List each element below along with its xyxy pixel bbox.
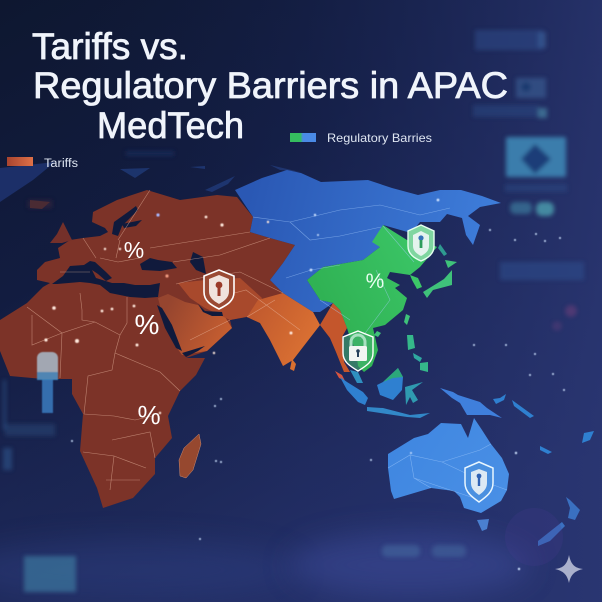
map: Borneo bbox=[377, 368, 403, 400]
map: Sumatra bbox=[340, 377, 368, 405]
title bbox=[32, 26, 508, 146]
title: MedTech bbox=[97, 105, 244, 146]
map: Sri Lanka bbox=[290, 359, 296, 371]
map: Honshu bbox=[423, 270, 452, 298]
map: Luzon bbox=[407, 335, 415, 350]
map: Madagascar bbox=[179, 434, 201, 478]
map: India shading bbox=[247, 293, 320, 366]
legend: regulatory barriers: Regulatory Barries bbox=[327, 131, 432, 145]
map: north Borneo bbox=[383, 368, 403, 382]
map: Sulawesi bbox=[405, 382, 423, 405]
map: Southeast Asia islands bbox=[335, 335, 594, 454]
map: Myanmar shading bbox=[320, 303, 350, 372]
map: Australia bbox=[388, 418, 509, 531]
blurred medical tube hologram bbox=[37, 352, 58, 413]
map: glowing data points bbox=[44, 213, 293, 414]
icon: padlock shield Southeast Asia bbox=[343, 331, 373, 371]
map: Taiwan bbox=[404, 314, 410, 325]
map: Hokkaido bbox=[445, 260, 457, 268]
legend: tariffs bbox=[7, 157, 78, 170]
title: Regulatory Barriers in APAC bbox=[33, 65, 508, 106]
map: Hainan bbox=[374, 331, 381, 337]
map: Korea bbox=[410, 275, 422, 289]
map: Siberia and Central Asia (blue) bbox=[235, 170, 501, 312]
lens flare ring bbox=[505, 305, 577, 566]
map: Iran and Pakistan shading bbox=[178, 278, 262, 320]
icon: shield Middle East bbox=[204, 270, 234, 309]
icon: shield Northeast China bbox=[408, 225, 434, 261]
map: New Guinea bbox=[440, 388, 502, 418]
map: UK bbox=[50, 222, 72, 243]
map: inland seas bbox=[52, 206, 223, 357]
icon: shield Australia bbox=[465, 462, 493, 502]
title: Tariffs vs. bbox=[32, 26, 188, 67]
map: smaller eastern islands bbox=[493, 394, 594, 454]
map: Iceland bbox=[30, 200, 50, 209]
map: Malay peninsula bbox=[350, 370, 363, 383]
icon: percent North Africa: % bbox=[135, 309, 159, 340]
map: Tasmania bbox=[477, 519, 489, 531]
map: Sumatra tip bbox=[335, 371, 345, 381]
map: faint North America silhouette at left bbox=[0, 162, 55, 202]
map: Java bbox=[367, 407, 430, 418]
icon: percent China: % bbox=[366, 270, 384, 293]
icon: sparkle watermark bbox=[555, 555, 583, 583]
map: New Zealand bbox=[538, 497, 580, 546]
icon: percent East Africa: % bbox=[137, 400, 161, 430]
map: Mindanao bbox=[420, 362, 428, 372]
map: China and Korea (green) bbox=[307, 225, 457, 372]
legend: regulatory barriers bbox=[290, 131, 432, 145]
map: Arctic islands bbox=[120, 165, 300, 192]
map: Arabia shading bbox=[158, 294, 232, 355]
map: borders and network lines bbox=[27, 190, 300, 490]
legend: tariffs: Tariffs bbox=[44, 158, 78, 170]
map: Visayas bbox=[413, 353, 422, 362]
map: tariff region (Europe, Middle East, South Asia, Africa) bbox=[0, 190, 350, 508]
icon: percent Europe: % bbox=[124, 237, 144, 263]
map: Sakhalin bbox=[438, 244, 447, 256]
